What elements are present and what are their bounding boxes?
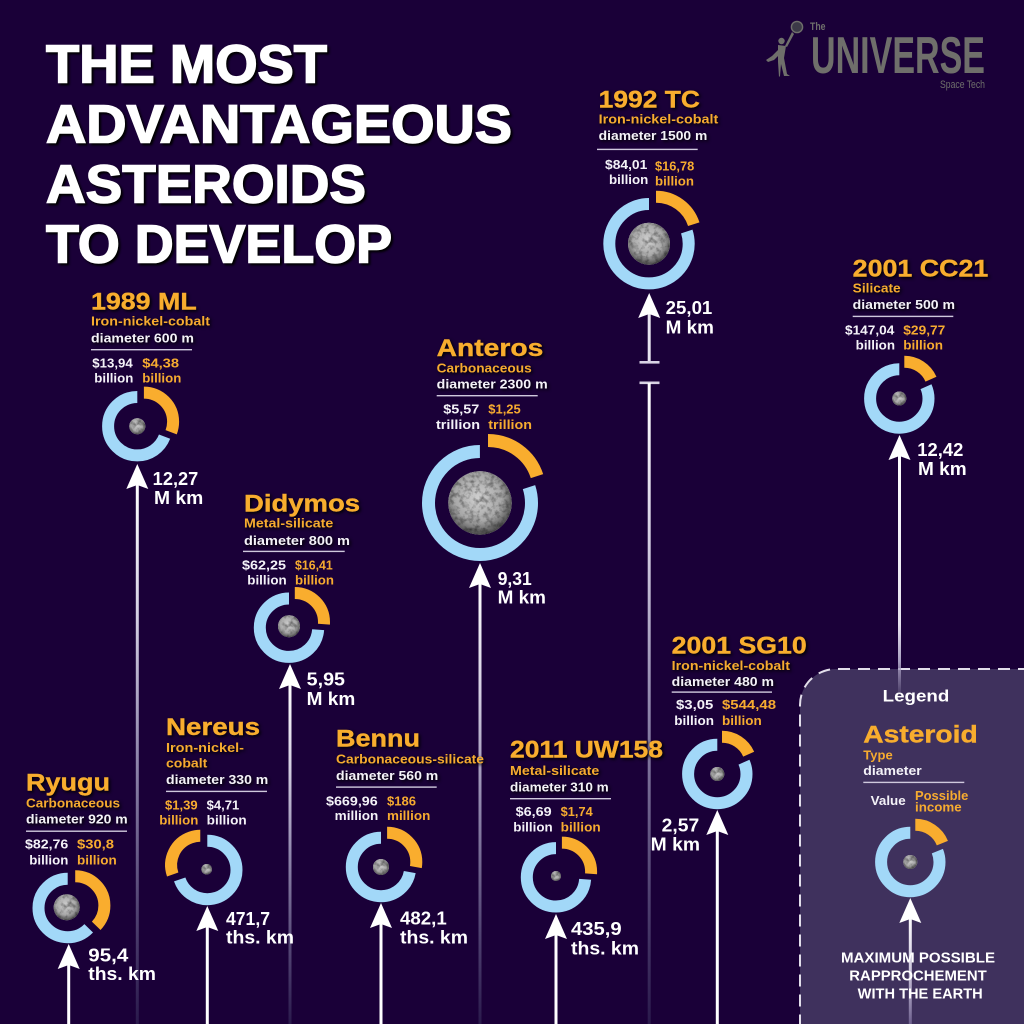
arrow: [469, 563, 491, 1024]
title: TO DEVELOP: [46, 214, 392, 274]
donut chart: [688, 737, 751, 803]
asteroid: Anteros: trillion: [436, 418, 480, 432]
labels: [437, 335, 548, 392]
asteroid: Didymos: billion: [295, 573, 334, 587]
legend caption: [841, 951, 995, 1002]
logo: The Universe Space Tech: [766, 21, 985, 91]
labels: Didymos: [244, 491, 360, 518]
labels: diameter 1500 m: [599, 129, 707, 143]
asteroid: Didymos: $62,25: [242, 558, 286, 572]
labels: 1992 TC: [599, 86, 700, 113]
asteroid: 1992 TC: billion: [655, 175, 694, 189]
asteroid: 1989 ML: M km: [154, 488, 203, 508]
labels: Iron-nickel-: [166, 741, 244, 755]
asteroid: 1992 TC: 25,01: [666, 298, 712, 318]
panel: legend: [800, 669, 1024, 1024]
asteroid: Bennu: [326, 726, 484, 1024]
legend labels: Possible: [915, 789, 968, 803]
donut chart: [609, 197, 696, 283]
asteroid: Nereus: [159, 714, 294, 1024]
asteroid: 2001 SG10: billion: [722, 714, 762, 728]
asteroid: Bennu: 482,1: [400, 908, 447, 928]
legend arrow: [899, 898, 921, 1024]
asteroid: 2001 SG10: $3,05: [676, 698, 713, 712]
asteroid: Nereus: billion: [207, 813, 247, 827]
labels: diameter 800 m: [244, 534, 350, 548]
asteroid: 1989 ML: $4,38: [142, 357, 179, 371]
labels: diameter 2300 m: [437, 378, 548, 392]
donut chart: [428, 440, 540, 554]
asteroid: Ryugu: 95,4: [88, 946, 128, 966]
labels: [336, 726, 484, 783]
labels: 2001 CC21: [853, 256, 988, 283]
legend caption: WITH THE EARTH: [858, 986, 983, 1002]
arrow: [706, 810, 728, 1024]
labels: diameter 480 m: [672, 675, 774, 689]
labels: diameter 600 m: [91, 332, 194, 346]
asteroid: 2001 SG10: 2,57: [662, 816, 699, 836]
title: THE MOST: [46, 34, 327, 94]
legend labels: Asteroid: [863, 721, 978, 748]
labels: Ryugu: [26, 770, 110, 797]
labels: Metal-silicate: [510, 764, 599, 778]
donut chart: [38, 876, 104, 937]
arrow: [545, 914, 567, 1024]
labels: Carbonaceous: [437, 362, 532, 376]
labels: 2001 SG10: [672, 632, 807, 659]
asteroid: Nereus: 471,7: [226, 909, 270, 929]
asteroid: 2001 SG10: $544,48: [722, 698, 776, 712]
legend heading: Legend: [883, 687, 949, 706]
labels: [91, 288, 211, 346]
donut chart: [163, 828, 237, 902]
asteroid: Bennu: $669,96: [326, 794, 378, 808]
asteroid: Didymos: M km: [307, 689, 355, 709]
asteroid: 2001 CC21: M km: [918, 459, 967, 479]
asteroid: Ryugu: [25, 770, 156, 1024]
labels: diameter 310 m: [510, 780, 609, 794]
asteroid: Ryugu: billion: [77, 853, 117, 867]
labels: Carbonaceous: [26, 797, 120, 811]
asteroid: 1989 ML: billion: [142, 371, 181, 385]
donut chart: [870, 362, 934, 428]
labels: diameter 560 m: [336, 769, 438, 783]
labels: [166, 714, 268, 787]
asteroid: Anteros: trillion: [488, 418, 532, 432]
asteroid: Nereus: $1,39: [165, 798, 198, 812]
asteroid: Anteros: [428, 335, 548, 1024]
legend background: [800, 669, 1024, 1024]
icon: figure holding globe: [766, 21, 803, 77]
asteroid: Ryugu: $82,76: [25, 838, 68, 852]
asteroid: 1992 TC: M km: [666, 317, 714, 337]
labels: [244, 491, 360, 548]
asteroid: 2011 UW158: 435,9: [571, 919, 622, 939]
asteroid: Bennu: million: [387, 809, 430, 823]
asteroid: 1992 TC: $16,78: [655, 160, 694, 174]
labels: diameter 330 m: [166, 773, 268, 787]
asteroid: 2011 UW158: $1,74: [561, 805, 593, 819]
asteroid: 1992 TC: billion: [609, 173, 648, 187]
asteroid: Nereus: $4,71: [207, 798, 239, 812]
donut chart: [352, 833, 416, 896]
labels: 1989 ML: [91, 288, 197, 315]
asteroid: Bennu: ths. km: [400, 927, 468, 947]
logo text: Space Tech: Space Tech: [940, 79, 985, 91]
labels: [26, 770, 128, 827]
asteroid: 1989 ML: [91, 288, 211, 1024]
asteroid: 2001 CC21: [845, 256, 988, 698]
labels: 2011 UW158: [510, 736, 663, 763]
labels: Iron-nickel-cobalt: [599, 113, 719, 127]
asteroid: Didymos: billion: [247, 573, 287, 587]
asteroid: 1992 TC: $84,01: [605, 158, 647, 172]
legend donut: [881, 825, 944, 891]
asteroid: Didymos: $16,41: [295, 558, 333, 572]
asteroid: Bennu: million: [335, 809, 378, 823]
legend labels: income: [915, 801, 962, 815]
legend labels: diameter: [863, 764, 922, 778]
labels: [599, 86, 719, 143]
asteroid: 2011 UW158: billion: [513, 820, 553, 834]
asteroid: Anteros: $1,25: [488, 403, 521, 417]
asteroid: Nereus: billion: [159, 813, 198, 827]
arrow: [279, 664, 301, 1024]
donut chart: [527, 843, 591, 906]
asteroid: 2001 CC21: $29,77: [903, 323, 945, 337]
asteroid: Didymos: [242, 491, 360, 1024]
title: [46, 34, 512, 274]
asteroid: Bennu: $186: [387, 794, 416, 808]
asteroid: 2001 SG10: M km: [651, 835, 700, 855]
asteroid: 2001 CC21: billion: [856, 338, 895, 352]
logo text: The: The: [810, 21, 826, 33]
labels: Iron-nickel-cobalt: [91, 315, 211, 329]
asteroid: 2001 SG10: billion: [674, 714, 714, 728]
asteroid: Nereus: ths. km: [226, 927, 294, 947]
labels: diameter 920 m: [26, 813, 128, 827]
labels: Silicate: [853, 282, 901, 296]
asteroid: 1989 ML: 12,27: [153, 469, 198, 489]
arrow: [888, 435, 910, 698]
labels: cobalt: [166, 756, 208, 770]
asteroid: 2011 UW158: [510, 736, 663, 1024]
asteroid: Didymos: 5,95: [307, 670, 345, 690]
asteroid: 2011 UW158: billion: [561, 820, 601, 834]
asteroid: 2001 CC21: billion: [903, 338, 943, 352]
labels: diameter 500 m: [853, 298, 955, 312]
legend labels: Type: [863, 748, 893, 762]
asteroid: 1989 ML: billion: [94, 371, 133, 385]
labels: Bennu: [336, 726, 420, 753]
labels: [853, 256, 988, 312]
labels: Iron-nickel-cobalt: [672, 659, 791, 673]
labels: [510, 736, 663, 794]
asteroid: Ryugu: billion: [29, 853, 68, 867]
asteroid: Ryugu: ths. km: [88, 964, 156, 984]
labels: [672, 632, 807, 689]
asteroid: Anteros: M km: [498, 587, 546, 607]
asteroid: 1992 TC: [597, 86, 719, 1024]
title: ADVANTAGEOUS: [46, 94, 512, 154]
labels: Anteros: [437, 335, 543, 362]
legend caption: MAXIMUM POSSIBLE: [841, 951, 995, 967]
asteroid: 2011 UW158: $6,69: [516, 805, 552, 819]
asteroid: 2001 CC21: 12,42: [917, 440, 963, 460]
arrow: [370, 903, 392, 1024]
asteroid: Anteros: 9,31: [498, 569, 532, 589]
donut chart: [260, 593, 324, 657]
arrow: [196, 906, 218, 1024]
asteroid: 2011 UW158: ths. km: [571, 938, 639, 958]
asteroid: 1989 ML: $13,94: [92, 357, 133, 371]
arrow: [126, 464, 148, 1024]
legend caption: RAPPROCHEMENT: [849, 969, 987, 985]
asteroid: 2001 SG10: [651, 632, 807, 1024]
legend labels: Value: [871, 794, 906, 808]
labels: Carbonaceous-silicate: [336, 752, 484, 766]
asteroid: Anteros: $5,57: [443, 403, 479, 417]
arrow: [58, 944, 80, 1024]
labels: Nereus: [166, 714, 260, 741]
asteroid: Ryugu: $30,8: [77, 838, 114, 852]
asteroid: 2001 CC21: $147,04: [845, 323, 894, 337]
donut chart: [108, 393, 173, 455]
legend labels: [863, 721, 978, 815]
title: ASTEROIDS: [46, 154, 366, 214]
arrow with scale break: [638, 293, 660, 1024]
labels: Metal-silicate: [244, 517, 333, 531]
